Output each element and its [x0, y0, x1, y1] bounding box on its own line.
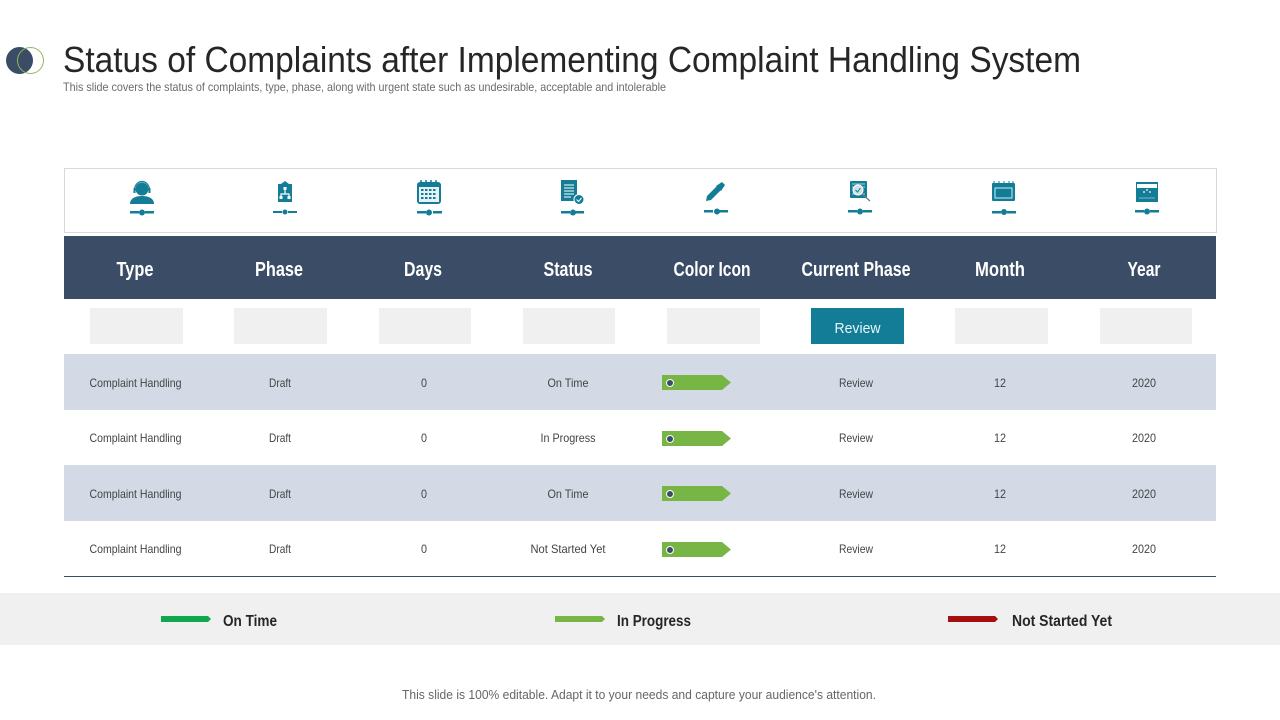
heading: Type: Type: [116, 259, 154, 281]
footer note: This slide is 100% editable. Adapt it to your needs and capture your audience's attention.: [402, 687, 876, 702]
panel: row 3: On Time: [548, 487, 589, 501]
icon: eyedropper: [704, 182, 728, 214]
panel: row 2: 2020: [1132, 431, 1156, 445]
title: Status of Complaints after Implementing Complaint Handling System: [63, 39, 1081, 80]
icon: green status tag: [662, 486, 731, 501]
legend item: Not Started Yet: [948, 613, 1113, 630]
legend item: Not Started Yet: Not Started Yet: [1012, 613, 1113, 630]
panel: row 2: In Progress: [540, 431, 596, 445]
panel: row 2: [90, 431, 1156, 446]
heading: Color Icon: Color Icon: [674, 259, 750, 281]
icon: monthly calendar: [992, 181, 1016, 215]
legend item: In Progress: [555, 613, 691, 630]
panel: row 3: 12: [994, 487, 1006, 501]
panel: row 2: Draft: [269, 431, 292, 445]
heading: Phase: Phase: [255, 259, 303, 281]
panel: row 4: Complaint Handling: [90, 542, 182, 556]
panel: row 3: Draft: [269, 487, 292, 501]
panel: row 3: 2020: [1132, 487, 1156, 501]
panel: icon strip: [64, 168, 1216, 232]
panel: row 4: 2020: [1132, 542, 1156, 556]
icon: green status tag: [662, 431, 731, 446]
icon: overlapping circles logo: [6, 47, 44, 74]
panel: legend: [0, 593, 1280, 645]
panel: row 1: Draft: [269, 376, 292, 390]
icon: clipboard hierarchy: [273, 181, 297, 214]
panel: row 3: [64, 465, 1216, 521]
icon: magnified report: [848, 181, 872, 214]
panel: row 1: 0: [421, 376, 427, 390]
panel: row 4: 12: [994, 542, 1006, 556]
subtitle: This slide covers the status of complaints, type, phase, along with urgent state such as undesirable, acceptable and intolerable: [63, 80, 666, 94]
panel: row 4: [90, 542, 1156, 557]
icon: document check: [561, 180, 584, 216]
panel: row 2: Complaint Handling: [90, 431, 182, 445]
panel: row 1: 12: [994, 376, 1006, 390]
panel: row 1: Complaint Handling: [90, 376, 182, 390]
panel: row 3: Complaint Handling: [90, 487, 182, 501]
panel: table header: [64, 236, 1216, 299]
icon: green status tag: [662, 375, 731, 390]
heading: Month: Month: [975, 259, 1025, 281]
legend item: On Time: [161, 613, 277, 630]
legend item: On Time: On Time: [223, 613, 277, 630]
panel: row 2: Review: [839, 431, 873, 445]
icon: support agent: [130, 182, 154, 216]
panel: row 2: 0: [421, 431, 427, 445]
panel: row 2: 12: [994, 431, 1006, 445]
panel: row 4: Draft: [269, 542, 292, 556]
legend item: In Progress: In Progress: [617, 613, 691, 630]
panel: row 1: [64, 354, 1216, 410]
panel: row 1: Review: [839, 376, 873, 390]
icon: green status tag: [662, 542, 731, 557]
panel: row 4: Review: [839, 542, 873, 556]
heading: Days: Days: [404, 259, 442, 281]
panel: row 4: 0: [421, 542, 427, 556]
panel: row 3: 0: [421, 487, 427, 501]
panel: row 3: Review: [839, 487, 873, 501]
heading: Current Phase: Current Phase: [802, 259, 910, 281]
panel: filter cells: Review: [834, 320, 881, 337]
panel: row 1: 2020: [1132, 376, 1156, 390]
icon: yearly calendar: [1135, 182, 1159, 214]
panel: row 4: Not Started Yet: [530, 542, 606, 556]
heading: Status: Status: [544, 259, 592, 281]
icon: calendar grid: [417, 180, 442, 216]
panel: filter cells: [90, 308, 1192, 344]
heading: Year: Year: [1128, 259, 1161, 281]
panel: row 1: On Time: [548, 376, 589, 390]
